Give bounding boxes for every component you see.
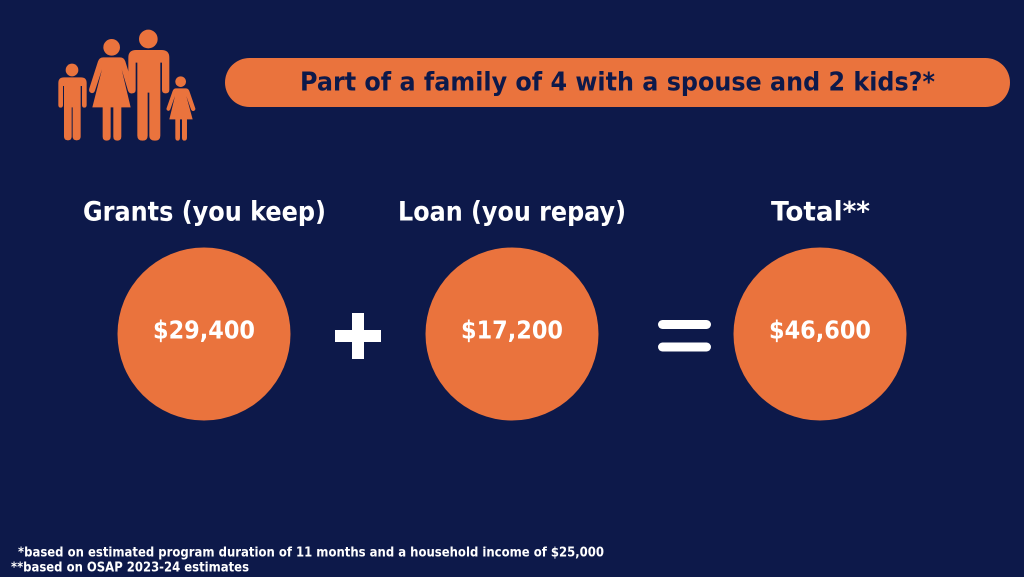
icon: man	[128, 30, 169, 141]
header pill	[225, 58, 1010, 107]
circle: grants amount: $29,400	[153, 316, 255, 344]
circle: total amount: $46,600	[769, 316, 871, 344]
icon: equals	[658, 320, 711, 352]
icon: girl	[166, 76, 195, 141]
icon: woman	[89, 39, 134, 141]
icon: plus	[335, 313, 381, 359]
heading: total: Total**	[771, 196, 870, 228]
icon: boy	[58, 64, 87, 140]
circle: loan amount: $17,200	[461, 316, 563, 344]
heading: grants: Grants (you keep)	[83, 196, 326, 228]
footnote: program duration: *based on estimated program duration of 11 months and a household income of $25,000	[18, 546, 604, 560]
header text: Part of a family of 4 with a spouse and 2 kids?*	[300, 68, 935, 98]
icon: family of four	[58, 30, 195, 141]
circle: loan amount	[426, 248, 598, 420]
circle: grants amount	[118, 248, 290, 420]
heading: loan: Loan (you repay)	[398, 196, 626, 228]
footnote: OSAP estimates: **based on OSAP 2023-24 estimates	[11, 560, 249, 576]
circle: total amount	[734, 248, 906, 420]
